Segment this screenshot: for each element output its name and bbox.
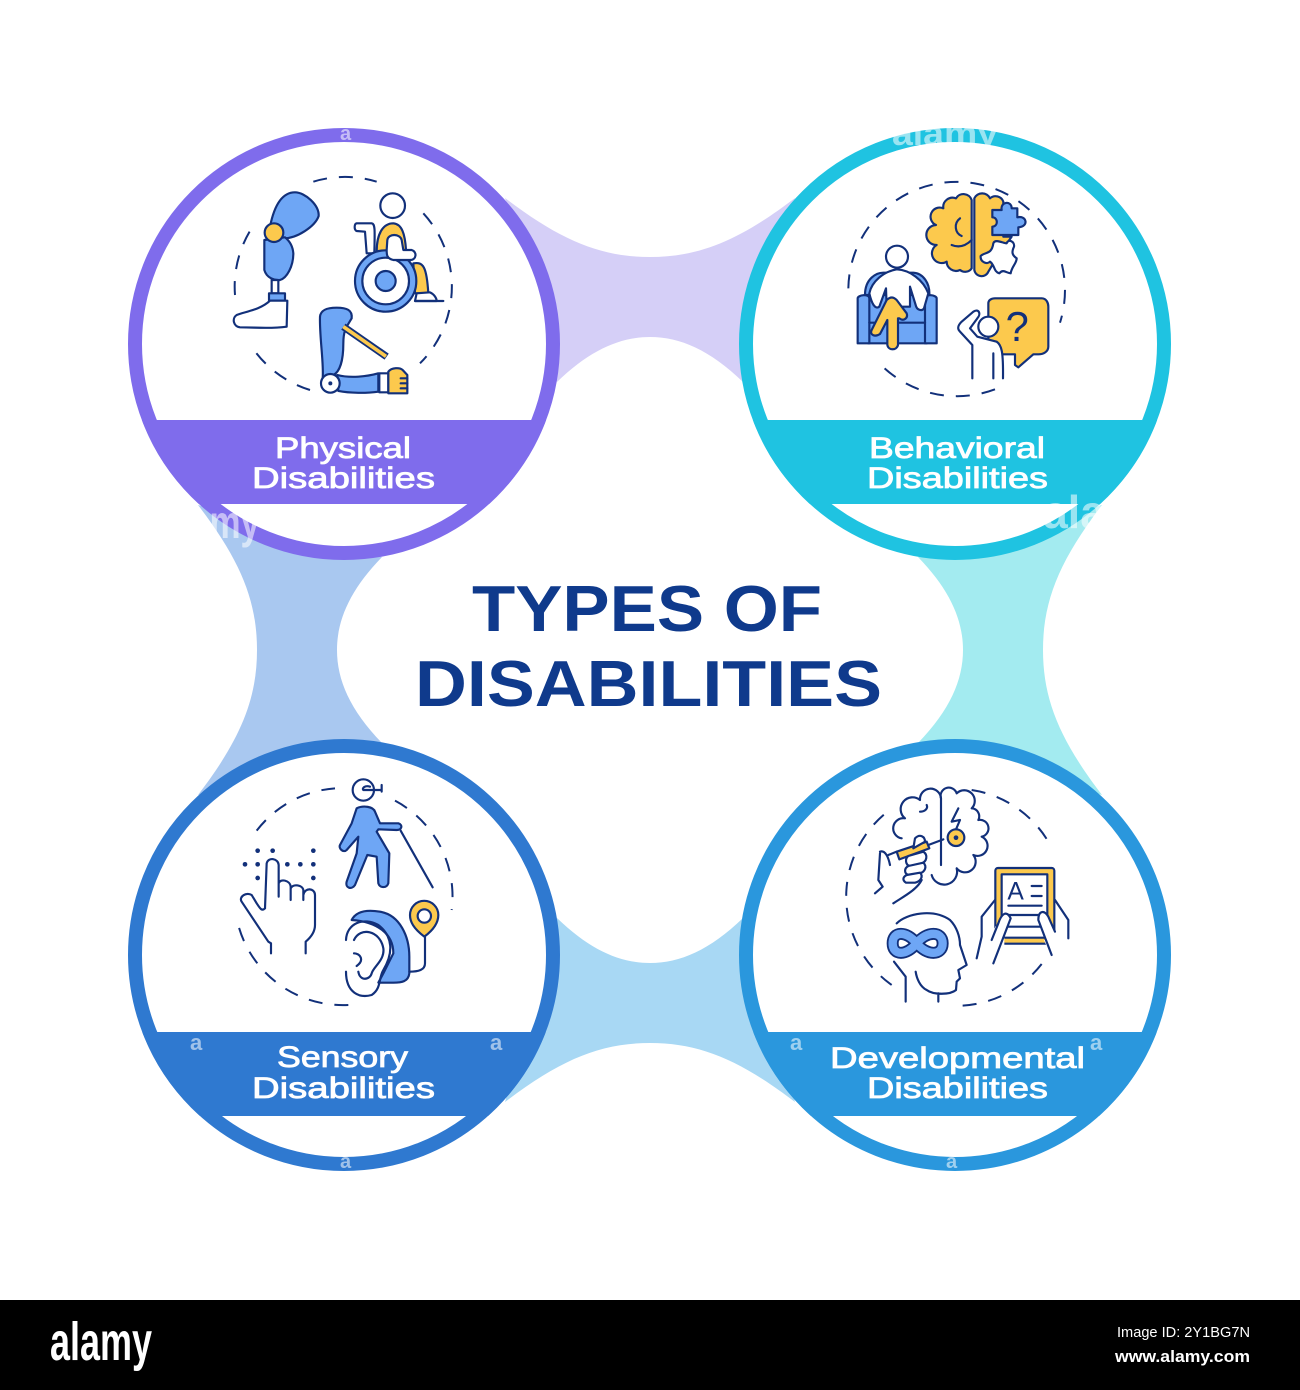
connector: bottom light blue	[505, 918, 795, 1102]
label: physical disabilities	[252, 432, 435, 495]
title	[415, 572, 882, 720]
watermarks: faint alamy marks: a	[340, 1151, 352, 1173]
connector: left blue	[198, 505, 382, 795]
footer url: www.alamy.com	[1114, 1347, 1250, 1366]
label: behavioral disabilities: Behavioral	[869, 432, 1045, 465]
watermarks: faint alamy marks: amy	[190, 496, 260, 548]
title: TYPES OF	[472, 572, 822, 645]
connector: top purple	[505, 198, 795, 382]
watermarks: faint alamy marks: a	[190, 1030, 203, 1055]
panel: developmental disabilities	[739, 746, 1171, 1164]
label: behavioral disabilities	[867, 432, 1048, 495]
panel: physical disabilities	[128, 135, 560, 553]
watermarks: faint alamy marks: a	[790, 1030, 803, 1055]
icon group: brain injection, infinity head, tablet	[846, 788, 1068, 1006]
watermarks: faint alamy marks: alamy	[892, 115, 998, 153]
icon group: prosthetics and wheelchair	[234, 177, 452, 393]
footer bar	[0, 1300, 1300, 1390]
label: sensory disabilities: Sensory	[277, 1041, 408, 1074]
panel: sensory disabilities	[128, 746, 560, 1164]
watermarks: faint alamy marks	[190, 115, 1105, 1173]
label: behavioral disabilities: Disabilities	[867, 462, 1048, 495]
label: developmental disabilities	[830, 1042, 1085, 1105]
watermarks: faint alamy marks: a	[490, 1030, 503, 1055]
icon group: brain, armchair person, question bubble	[848, 182, 1065, 396]
connector: right teal	[918, 505, 1102, 795]
label: sensory disabilities: Disabilities	[252, 1072, 435, 1105]
watermarks: faint alamy marks: a	[340, 123, 352, 145]
label: physical disabilities: Disabilities	[252, 462, 435, 495]
label: physical disabilities: Physical	[275, 432, 411, 465]
panel: behavioral disabilities	[739, 135, 1171, 553]
watermarks: faint alamy marks: a	[946, 1151, 958, 1173]
question mark: ?	[1006, 303, 1029, 350]
footer logo: alamy	[50, 1312, 152, 1372]
watermarks: faint alamy marks: ala	[1043, 486, 1105, 538]
watermarks: faint alamy marks: a	[1090, 1030, 1103, 1055]
tablet letter: A	[1007, 878, 1024, 905]
icon group: braille, cane user, hearing aid	[237, 779, 453, 1005]
label: sensory disabilities	[252, 1041, 435, 1105]
label: developmental disabilities: Disabilities	[867, 1072, 1048, 1105]
footer image id: Image ID: 2Y1BG7N	[1117, 1324, 1250, 1341]
title: DISABILITIES	[415, 647, 882, 720]
label: developmental disabilities: Developmental	[830, 1042, 1085, 1075]
